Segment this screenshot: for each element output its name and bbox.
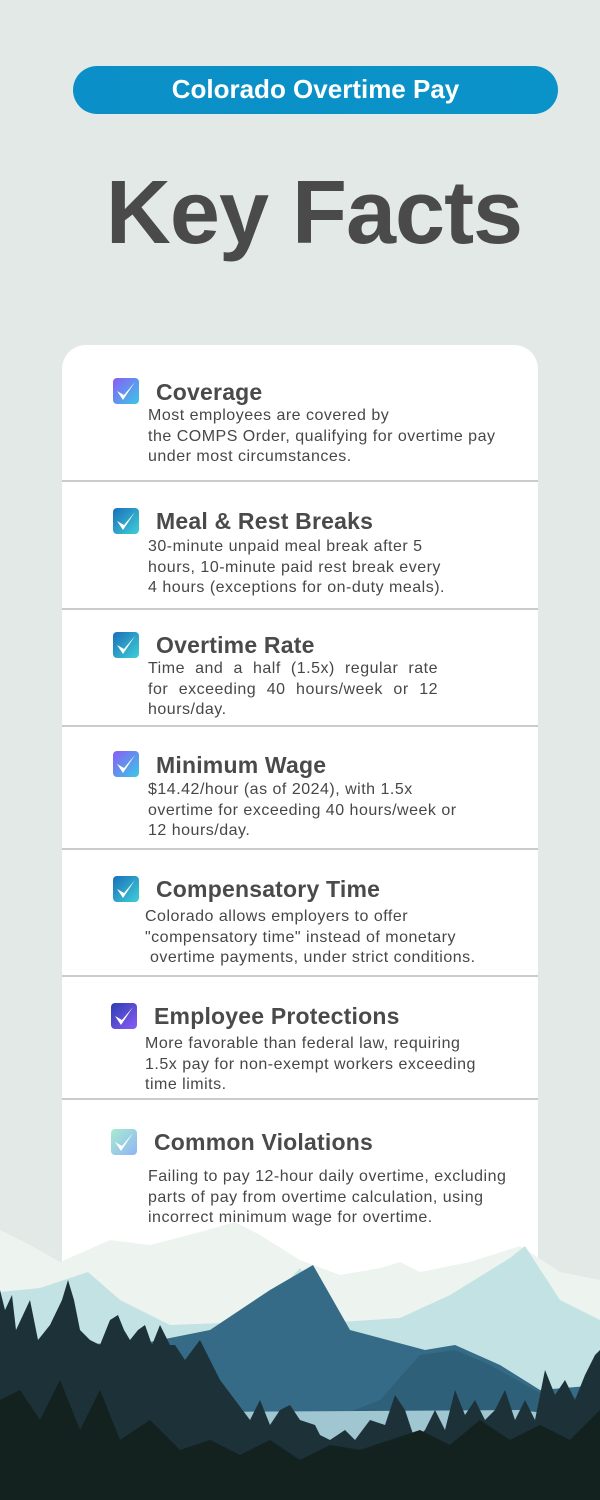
header pill: [73, 66, 558, 114]
text: for exceeding 40 hours/week or 12: [148, 680, 438, 698]
title: Key Facts: [106, 163, 522, 263]
text: Most employees are covered by: [148, 407, 389, 424]
text: [148, 781, 457, 839]
text: 30-minute unpaid meal break after 5: [148, 538, 423, 555]
section: common violations: [111, 1129, 506, 1226]
section: overtime rate: [113, 632, 438, 718]
header pill: Colorado Overtime Pay: [172, 74, 459, 104]
section: minimum wage: [113, 751, 457, 839]
text: overtime payments, under strict conditions.: [150, 949, 476, 966]
text: 12 hours/day.: [148, 822, 250, 839]
text: More favorable than federal law, requiring: [145, 1035, 460, 1052]
text: [145, 908, 476, 966]
text: the COMPS Order, qualifying for overtime pay: [148, 428, 495, 444]
heading: Employee Protections: [154, 1003, 400, 1029]
text: time limits.: [145, 1076, 227, 1093]
icon: check: [113, 751, 139, 777]
text: Failing to pay 12-hour daily overtime, excluding: [148, 1168, 506, 1185]
icon: check: [111, 1129, 137, 1155]
text: [148, 538, 445, 596]
text: "compensatory time" instead of monetary: [145, 928, 456, 946]
text: hours, 10-minute paid rest break every: [148, 558, 441, 576]
icon: check: [111, 1003, 137, 1029]
text: overtime for exceeding 40 hours/week or: [148, 802, 457, 818]
heading: Meal & Rest Breaks: [156, 508, 373, 534]
text: hours/day.: [148, 701, 227, 718]
text: 1.5x pay for non-exempt workers exceeding: [145, 1056, 476, 1072]
heading: Minimum Wage: [156, 752, 326, 778]
section: compensatory time: [113, 876, 476, 966]
section: coverage: [113, 378, 495, 465]
text: Colorado allows employers to offer: [145, 908, 408, 925]
heading: Compensatory Time: [156, 876, 380, 902]
text: $14.42/hour (as of 2024), with 1.5x: [148, 781, 413, 798]
heading: Overtime Rate: [156, 632, 315, 658]
text: 4 hours (exceptions for on-duty meals).: [148, 579, 445, 596]
icon: check: [113, 876, 139, 902]
text: Time and a half (1.5x) regular rate: [148, 660, 438, 677]
text: [148, 660, 438, 718]
heading: Coverage: [156, 379, 262, 405]
icon: check: [113, 508, 139, 534]
landscape illustration: [0, 1222, 600, 1500]
text: under most circumstances.: [148, 448, 352, 465]
text: parts of pay from overtime calculation, using: [148, 1188, 484, 1206]
section: meal: [113, 508, 445, 596]
section: employee protections: [111, 1003, 476, 1093]
icon: check: [113, 378, 139, 404]
text: [148, 1168, 506, 1226]
heading: Common Violations: [154, 1129, 373, 1155]
card: [62, 345, 538, 1305]
text: incorrect minimum wage for overtime.: [148, 1209, 433, 1226]
text: [145, 1035, 476, 1093]
icon: check: [113, 632, 139, 658]
text: [148, 407, 495, 465]
